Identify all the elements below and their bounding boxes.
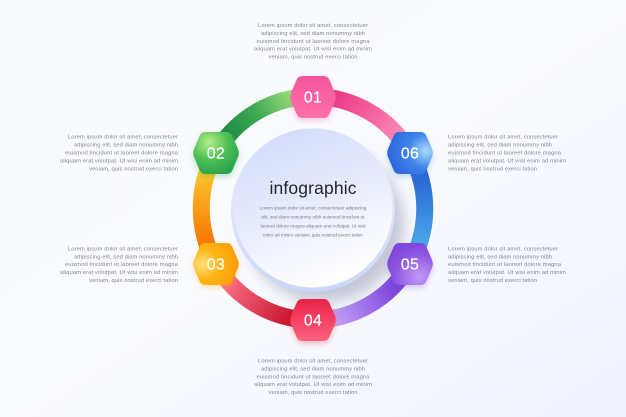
hexagon 04: 04	[304, 313, 322, 330]
text block: top: adipiscing elit, sed diam nonummy nibh	[261, 31, 365, 37]
text block: top: aliquam erat volutpat. Ut wisi enim ad minim	[254, 47, 372, 53]
hexagon 02	[193, 132, 239, 177]
text block: right lower: veniam, quis nostrud exerci tation	[448, 278, 537, 284]
text block: top: euismod tincidunt ut laoreet dolore magna	[256, 39, 370, 45]
hexagon 05	[387, 243, 433, 288]
text block: bottom: aliquam erat volutpat. Ut wisi enim ad minim	[254, 382, 372, 388]
text block: left upper: euismod tincidunt ut laoreet dolore magna	[65, 150, 179, 156]
text block: left upper: Lorem ipsum dolor sit amet, consectetuer	[68, 135, 178, 141]
text block: left upper: veniam, quis nostrud exerci tation	[89, 166, 178, 172]
text block: bottom: veniam, quis nostrud exerci tation	[268, 390, 358, 396]
center text block: enim ad minim veniam, quis nostrud exerci tation	[263, 233, 363, 239]
text block: right upper: veniam, quis nostrud exerci tation	[448, 166, 537, 172]
center text block: elit, sed diam nonummy nibh euismod tincidunt ut	[262, 214, 365, 220]
hexagon 01: 01	[304, 90, 322, 107]
hexagon 02: 02	[207, 146, 225, 163]
text block: left upper: aliquam erat volutpat. Ut wisi enim ad minim	[60, 158, 178, 164]
hexagon 05: 05	[401, 257, 419, 274]
center title: infographic	[270, 178, 357, 198]
text block: right upper: euismod tincidunt ut laoreet dolore magna	[448, 150, 562, 156]
central disc	[231, 128, 404, 302]
text block: left lower: Lorem ipsum dolor sit amet, consectetuer	[68, 246, 178, 252]
text block: right lower: Lorem ipsum dolor sit amet, consectetuer	[448, 246, 558, 252]
text block: bottom: euismod tincidunt ut laoreet dolore magna	[256, 374, 370, 380]
hexagon 03	[193, 243, 239, 288]
center text block	[260, 206, 367, 239]
text block: right lower: adipiscing elit, sed diam nonummy nibh	[448, 254, 552, 260]
text block: right upper: aliquam erat volutpat. Ut wisi enim ad minim	[448, 158, 566, 164]
text block: left lower: adipiscing elit, sed diam nonummy nibh	[74, 254, 178, 260]
text block: left upper: adipiscing elit, sed diam nonummy nibh	[74, 143, 178, 149]
ring of coloured arc segments	[201, 96, 425, 320]
text block: bottom: adipiscing elit, sed diam nonummy nibh	[261, 366, 365, 372]
text block: top: Lorem ipsum dolor sit amet, consectetuer	[258, 23, 368, 29]
hexagon 06: 06	[401, 146, 419, 163]
text block: right lower: aliquam erat volutpat. Ut wisi enim ad minim	[448, 270, 566, 276]
text block: left lower: veniam, quis nostrud exerci tation	[89, 278, 178, 284]
hexagon 01	[290, 76, 336, 121]
text block: left upper	[60, 135, 179, 172]
text block: right upper: adipiscing elit, sed diam nonummy nibh	[448, 143, 552, 149]
text block: right lower: euismod tincidunt ut laoreet dolore magna	[448, 262, 562, 268]
text block: bottom	[254, 359, 372, 396]
center text block: Lorem ipsum dolor sit amet, consectetuer adipiscing	[260, 206, 367, 212]
hexagon 06	[387, 132, 433, 177]
text block: right upper: Lorem ipsum dolor sit amet, consectetuer	[448, 135, 558, 141]
hexagon 03: 03	[207, 257, 225, 274]
text block: bottom: Lorem ipsum dolor sit amet, consectetuer	[258, 359, 368, 365]
center text block: laoreet dolore magna aliquam erat volutpat. Ut wisi	[260, 224, 366, 230]
text block: top: veniam, quis nostrud exerci tation	[268, 55, 358, 61]
text block: right upper	[448, 135, 566, 172]
text block: top	[254, 23, 372, 61]
text block: left lower: euismod tincidunt ut laoreet dolore magna	[65, 262, 179, 268]
text block: right lower	[448, 246, 566, 284]
text block: left lower	[60, 246, 179, 284]
hexagon 04	[290, 299, 336, 344]
text block: left lower: aliquam erat volutpat. Ut wisi enim ad minim	[60, 270, 178, 276]
